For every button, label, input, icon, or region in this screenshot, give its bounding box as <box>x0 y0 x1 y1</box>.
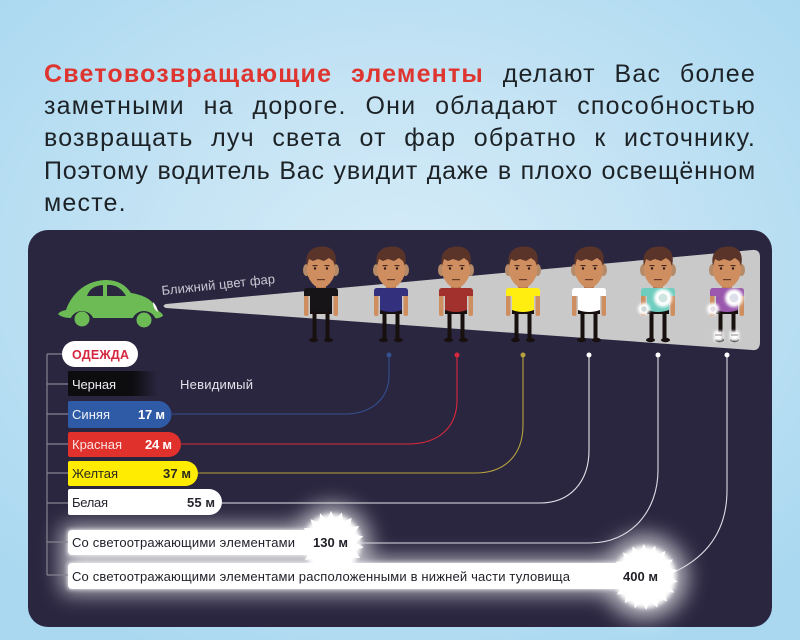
bar: reflective elements low on torso, 400 m: Со светоотражающими элементами расположенными в нижней части туловища <box>72 569 571 584</box>
bar: blue: Синяя <box>72 407 110 422</box>
bar: blue: 17 м <box>138 407 165 422</box>
bar: black: Черная <box>72 377 116 392</box>
bar: white: 55 м <box>187 495 215 510</box>
intro text block: возвращать луч света от фар обратно к источнику. <box>44 124 756 152</box>
bar: reflective elements low on torso, 400 m: 400 м <box>623 569 658 584</box>
bar: red: Красная <box>72 437 122 452</box>
intro text block: заметными на дороге. Они обладают способностью <box>44 92 756 120</box>
figure: yellow clothing <box>505 246 541 342</box>
bar: red: 24 м <box>145 437 172 452</box>
bar: reflective elements, 130 m <box>68 507 368 579</box>
intro text block <box>44 60 756 217</box>
intro text block: месте. <box>44 189 127 217</box>
bar: red <box>68 432 181 457</box>
beam label: Ближний цвет фар <box>161 271 276 298</box>
panel: dark background <box>28 230 772 627</box>
glow behind reflective bars <box>62 505 687 619</box>
legend heading: clothing <box>62 341 138 367</box>
intro text block: Поэтому водитель Вас увидит даже в плохо освещённом <box>44 157 756 185</box>
figure: blue clothing <box>373 246 409 342</box>
bar: reflective elements low on torso, 400 m <box>68 540 682 614</box>
connector: white <box>222 355 589 503</box>
bar: yellow: Желтая <box>72 466 118 481</box>
icon: green car <box>58 280 163 328</box>
intro text block: Световозвращающие элементы делают Вас более <box>44 60 756 88</box>
connector lines from clothing bars to figures <box>172 355 727 573</box>
bar: reflective elements, 130 m: Со светоотражающими элементами <box>72 535 295 550</box>
bar: yellow: 37 м <box>163 466 191 481</box>
bar: white: Белая <box>72 495 108 510</box>
connector: reflective low <box>672 355 727 573</box>
bar: blue <box>68 401 172 428</box>
bar: black <box>68 371 253 396</box>
figure: reflective elements on torso and legs <box>706 246 745 342</box>
connector: yellow <box>198 355 523 473</box>
bar: black: Невидимый <box>180 377 253 392</box>
figure: reflective elements on torso <box>637 246 676 342</box>
bar: yellow <box>68 461 198 486</box>
figure: white clothing <box>571 246 607 342</box>
connector: blue <box>172 355 389 414</box>
light beam <box>164 250 760 350</box>
connector: reflective <box>355 355 658 543</box>
bar: reflective elements, 130 m: 130 м <box>313 535 348 550</box>
figure: black clothing <box>303 246 339 342</box>
bar: white <box>68 489 222 515</box>
figure: red clothing <box>438 246 474 342</box>
legend heading: clothing: ОДЕЖДА <box>72 348 129 362</box>
connector dots <box>386 352 730 358</box>
connector: red <box>181 355 457 444</box>
legend tree lines <box>47 354 68 575</box>
